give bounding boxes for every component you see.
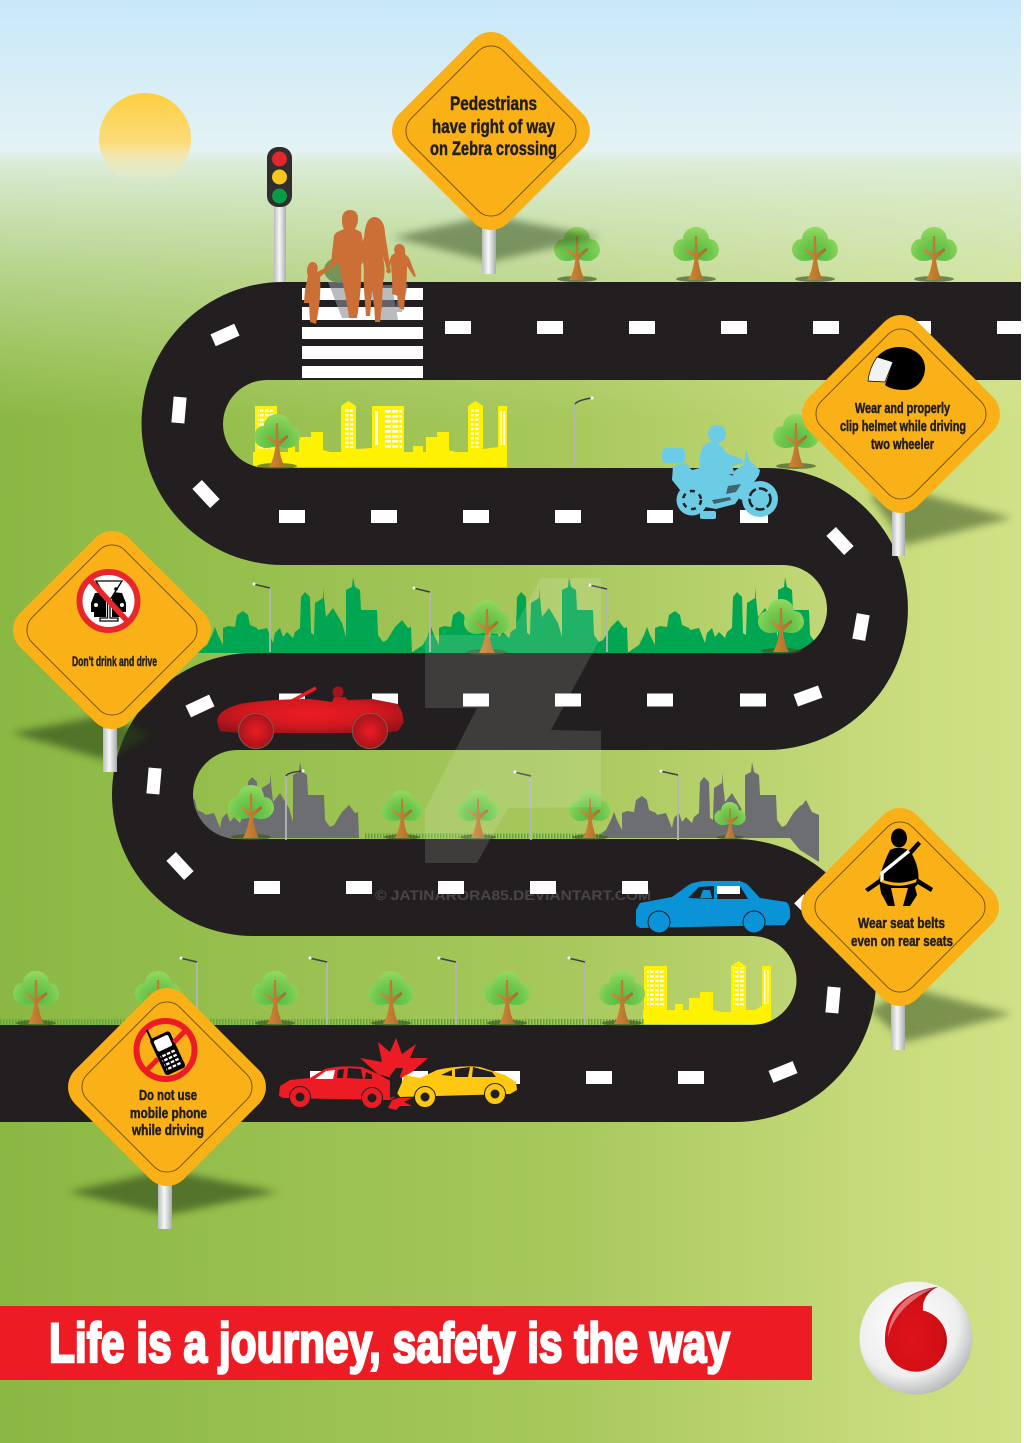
watermark text: © JATINARORA85.DEVIANTART.COM — [375, 887, 651, 903]
motorcycle with rider — [662, 425, 778, 519]
trees along top of road — [554, 227, 957, 282]
sign text — [430, 94, 557, 160]
sign text: Pedestrians — [450, 94, 537, 115]
grey city skyline, left — [193, 762, 359, 838]
grey skyline end block — [790, 800, 819, 862]
icon: no drink and drive — [80, 572, 138, 630]
sign text: Do not use — [139, 1087, 197, 1104]
impact crack — [390, 1068, 403, 1098]
sign: pedestrians — [382, 22, 600, 274]
sign: mobile phone — [58, 978, 278, 1229]
sign text: Wear and properly — [855, 401, 950, 417]
sign: don't drink and drive — [3, 521, 221, 772]
girl — [386, 244, 416, 310]
pedestrian shadows — [324, 257, 408, 320]
red car — [279, 1066, 395, 1100]
pedestrian family — [304, 210, 416, 324]
banner: slogan — [0, 1306, 812, 1380]
trees, third row — [464, 599, 804, 655]
trees, fourth row — [228, 785, 746, 840]
sign: helmet — [792, 305, 1012, 556]
road centre dashes — [146, 321, 1021, 1084]
grass strips — [0, 836, 645, 1022]
sun — [99, 93, 191, 185]
street lamps — [180, 396, 678, 1025]
sign text — [840, 401, 966, 453]
explosion burst — [360, 1038, 428, 1080]
trees, second row — [254, 414, 819, 469]
crash: red car, yellow car and explosion — [279, 1038, 517, 1110]
sign text — [851, 915, 953, 950]
boy — [304, 260, 337, 324]
man — [331, 210, 363, 318]
sign text: Wear seat belts — [858, 915, 945, 932]
blue car — [636, 881, 790, 933]
sign text: two wheeler — [871, 437, 934, 453]
sign text: mobile phone — [130, 1105, 207, 1122]
green city skyline — [195, 577, 844, 653]
icon: no mobile phone — [136, 1021, 194, 1079]
traffic light — [267, 147, 292, 282]
sign text: while driving — [131, 1122, 204, 1139]
sign: seat belts — [791, 798, 1012, 1050]
vodafone logo — [860, 1282, 972, 1394]
yellow city skyline, lower — [643, 961, 771, 1024]
sign text: even on rear seats — [851, 933, 953, 950]
sign text: on Zebra crossing — [430, 139, 557, 160]
slogan text: Life is a journey, safety is the way — [49, 1311, 730, 1374]
icon: seat belt figure — [865, 828, 933, 906]
zebra crossing — [302, 288, 423, 378]
winding road — [0, 282, 1021, 1122]
yellow city skyline, upper — [253, 401, 507, 467]
sign text: Don't drink and drive — [72, 654, 157, 669]
watermark: deviantart logo — [425, 578, 601, 863]
grey city skyline, right — [600, 762, 802, 838]
sign text — [130, 1087, 207, 1139]
sign text: have right of way — [432, 117, 555, 138]
woman — [356, 217, 391, 322]
sign text: clip helmet while driving — [840, 419, 966, 435]
red convertible — [217, 686, 404, 748]
trees, fifth row — [13, 971, 645, 1026]
right edge margin — [1021, 0, 1024, 1443]
icon: helmet — [868, 347, 925, 390]
yellow car — [397, 1066, 517, 1097]
